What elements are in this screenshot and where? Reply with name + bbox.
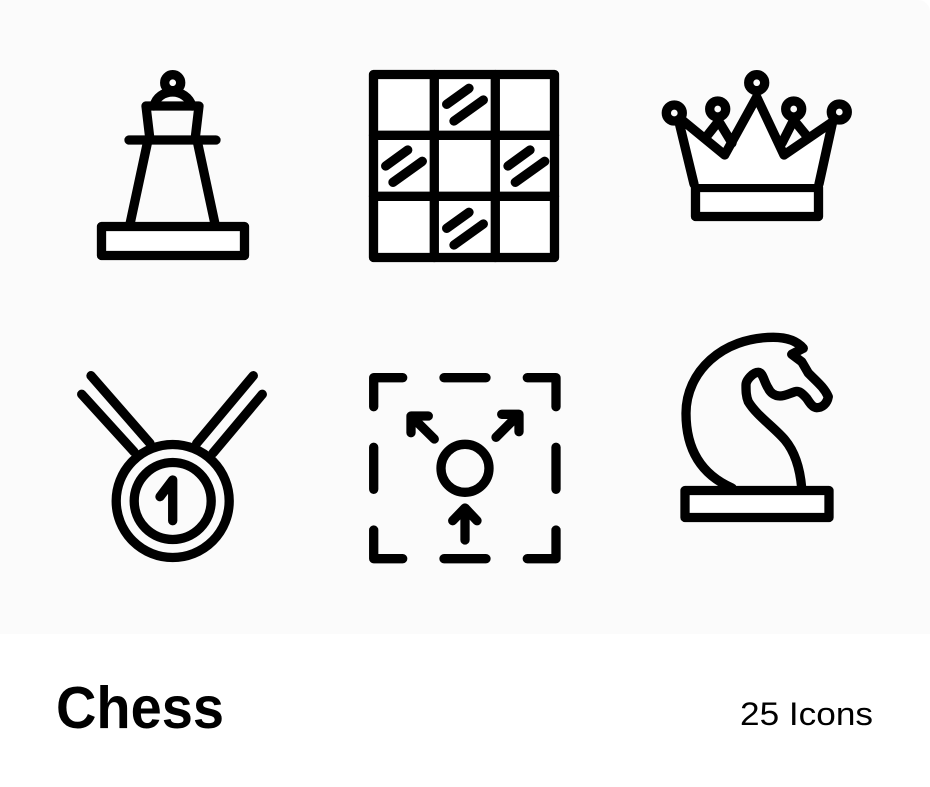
board square hatching — [386, 88, 545, 245]
icon: piece movement selection — [374, 378, 556, 559]
title: Chess — [56, 675, 224, 741]
icon: crown — [666, 75, 847, 216]
icon: queen chess piece — [102, 75, 244, 256]
icon group: chess icons — [82, 74, 847, 559]
icon count label: 25 Icons — [740, 696, 873, 732]
icon: knight chess piece — [685, 337, 829, 518]
icon: medal with number one — [82, 376, 262, 558]
icon: chess board — [374, 74, 554, 258]
